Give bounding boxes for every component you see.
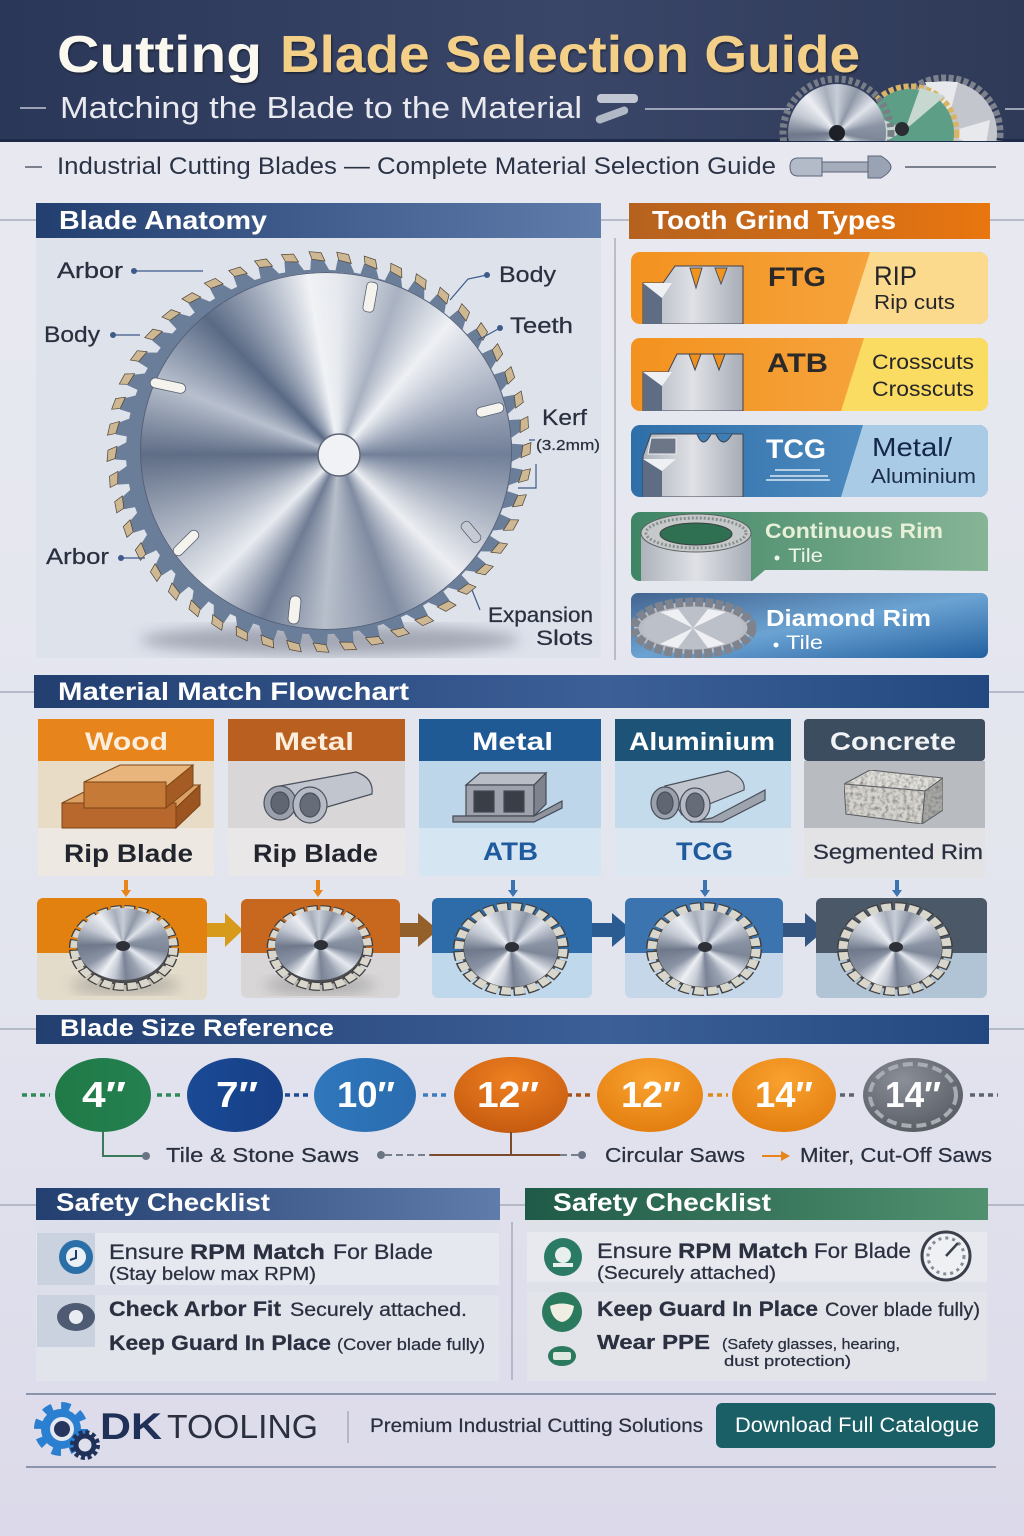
row: TCG: Aluminium xyxy=(871,466,976,488)
row: FTG: RIP xyxy=(874,261,917,291)
icon: header blades xyxy=(780,74,1004,141)
title xyxy=(57,26,860,84)
size: 12 inch xyxy=(597,1058,703,1132)
size: 14 inch segmented xyxy=(863,1058,963,1132)
row: TCG: TCG xyxy=(766,434,826,464)
row: RPM: Ensure xyxy=(597,1240,672,1263)
card: metal rip: Rip Blade xyxy=(253,840,378,868)
tagline: Premium Industrial Cutting Solutions xyxy=(370,1416,703,1437)
row: TCG: Metal/ xyxy=(872,432,953,462)
subtitle: Matching the Blade to the Material xyxy=(60,90,582,125)
row: continuous rim: Tile xyxy=(788,546,823,567)
icon: blade xyxy=(843,907,947,991)
arrow: ATB to aluminium xyxy=(592,913,632,947)
panel: blade size reference xyxy=(22,1015,998,1167)
card: metal rip xyxy=(228,719,405,876)
icon: concrete block xyxy=(844,770,943,824)
icon: blade xyxy=(459,907,563,991)
icon: bolt xyxy=(790,156,891,178)
title: Cutting xyxy=(57,26,262,84)
row: ATB: Crosscuts xyxy=(872,351,974,374)
panel: tooth grind types xyxy=(629,203,990,658)
heading: size reference: Blade Size Reference xyxy=(60,1015,334,1042)
size: 7 inch xyxy=(187,1058,283,1132)
heading: flowchart: Material Match Flowchart xyxy=(58,678,410,706)
application labels: Circular Saws xyxy=(605,1145,745,1167)
size: 4 inch: 4″ xyxy=(82,1074,126,1115)
logo wordmark xyxy=(100,1406,318,1447)
row: arbor and guard: Securely attached. xyxy=(290,1300,467,1321)
heading: safety checklist xyxy=(36,1188,500,1220)
arrow: aluminium to concrete xyxy=(783,913,825,947)
row: arbor and guard: (Cover blade fully) xyxy=(337,1335,485,1354)
heading: size reference xyxy=(36,1015,989,1044)
icon: wood planks xyxy=(62,765,200,828)
size: 14 inch xyxy=(732,1058,836,1132)
anatomy labels: Arbor xyxy=(46,544,109,569)
row: FTG: Rip cuts xyxy=(874,292,955,314)
blade tile: metal ATB xyxy=(432,898,592,998)
heading: safety checklist xyxy=(525,1188,988,1220)
expansion slots xyxy=(149,281,505,624)
application labels xyxy=(166,1145,992,1167)
header banner xyxy=(0,0,1024,142)
size: 4 inch xyxy=(55,1058,151,1132)
card: wood: Rip Blade xyxy=(64,840,193,868)
subtitle band: Industrial Cutting Blades — Complete Material Selection Guide xyxy=(57,153,776,180)
card: wood xyxy=(38,719,214,876)
row: RPM: Ensure xyxy=(109,1241,184,1264)
icon: metal tubes xyxy=(264,772,372,823)
logo wordmark: DK xyxy=(100,1406,162,1447)
connector arrows: card to blade xyxy=(121,880,902,897)
card: aluminium xyxy=(615,719,791,876)
row: RPM: For Blade xyxy=(814,1240,911,1263)
icon: aluminium tubes xyxy=(651,771,765,822)
row: continuous rim xyxy=(631,512,988,581)
row: arbor and guard: Keep Guard In Place xyxy=(109,1332,331,1355)
heading: tooth grind types: Tooth Grind Types xyxy=(652,205,896,235)
heading: flowchart xyxy=(34,675,989,708)
row: RPM xyxy=(527,1232,987,1283)
icon: saw blade xyxy=(89,234,549,670)
row: continuous rim: Continuous Rim xyxy=(765,520,943,543)
button: download catalogue: Download Full Catalogue xyxy=(735,1414,979,1437)
icon: TCG tooth xyxy=(643,434,743,497)
row: guard and PPE: Wear PPE xyxy=(597,1332,710,1354)
application labels: Miter, Cut-Off Saws xyxy=(800,1145,992,1167)
anatomy labels: Teeth xyxy=(510,313,573,338)
button: download catalogue xyxy=(716,1403,995,1448)
heading: blade anatomy: Blade Anatomy xyxy=(59,205,268,235)
row: ATB: ATB xyxy=(767,348,828,378)
card: metal ATB: Metal xyxy=(472,728,553,756)
row: arbor and guard: Check Arbor Fit xyxy=(109,1298,281,1321)
size: 10 inch: 10″ xyxy=(337,1074,395,1115)
row: diamond rim xyxy=(631,593,988,658)
icon: gauge xyxy=(922,1232,970,1280)
section rules xyxy=(0,220,1024,1380)
panel: safety checklist left xyxy=(36,1188,500,1381)
row: guard and PPE: (Safety glasses, hearing, xyxy=(722,1336,900,1353)
subtitle band xyxy=(25,153,996,180)
blade tile: aluminium xyxy=(625,898,783,998)
icon: guard xyxy=(542,1292,582,1332)
anatomy labels: Slots xyxy=(536,627,593,650)
row: guard and PPE: Cover blade fully) xyxy=(825,1300,980,1321)
icon: continuous rim cylinder xyxy=(641,514,751,581)
size connectors xyxy=(22,1093,998,1097)
icon: arbor xyxy=(57,1303,95,1331)
row: FTG xyxy=(631,252,988,324)
panel: blade anatomy xyxy=(36,203,601,670)
row: RPM: (Securely attached) xyxy=(597,1263,776,1283)
TCG dimension lines xyxy=(766,470,830,480)
card: metal ATB xyxy=(419,719,601,876)
row: diamond rim: Tile xyxy=(786,633,823,654)
icon: steel block xyxy=(453,773,562,822)
icon: blade xyxy=(75,908,173,986)
row: arbor and guard xyxy=(36,1295,499,1381)
heading: blade anatomy xyxy=(36,203,601,238)
card: aluminium: Aluminium xyxy=(629,728,775,756)
card: metal ATB: ATB xyxy=(483,838,538,866)
icon: FTG tooth xyxy=(643,266,743,324)
icon: RPM xyxy=(544,1238,582,1276)
logo wordmark: TOOLING xyxy=(167,1408,318,1445)
size: 14 inch segmented: 14″ xyxy=(885,1074,941,1115)
size: 10 inch xyxy=(314,1058,416,1132)
card: aluminium: TCG xyxy=(676,838,733,866)
size: 12 inch: 12″ xyxy=(477,1074,539,1115)
anatomy labels: Kerf xyxy=(542,405,588,430)
icon: PPE xyxy=(548,1346,576,1366)
icon: RPM xyxy=(59,1240,93,1274)
row: RPM: RPM Match xyxy=(678,1240,808,1263)
anatomy labels xyxy=(44,258,600,650)
header rules xyxy=(20,108,1024,109)
icon: ATB tooth xyxy=(643,354,743,411)
anatomy labels: Arbor xyxy=(57,258,123,283)
row: RPM: (Stay below max RPM) xyxy=(109,1264,316,1284)
title: Blade Selection Guide xyxy=(280,26,860,84)
blade tile: wood xyxy=(37,898,207,1000)
arrow: metal to ATB xyxy=(400,913,438,947)
row: RPM: RPM Match xyxy=(190,1241,325,1264)
row: RPM: For Blade xyxy=(333,1241,433,1264)
row: guard and PPE xyxy=(527,1292,987,1381)
blade shadow xyxy=(140,625,520,655)
heading: tooth grind types xyxy=(629,203,990,239)
size: 14 inch: 14″ xyxy=(755,1074,813,1115)
arbor hole xyxy=(318,434,360,476)
icon: pins xyxy=(595,94,638,125)
panel: safety checklist right xyxy=(525,1188,988,1381)
blade tile: concrete xyxy=(816,898,987,998)
anatomy labels: Expansion xyxy=(488,604,593,627)
arrow: wood to metal xyxy=(207,913,243,947)
panel background xyxy=(36,238,601,658)
icon: diamond rim blade xyxy=(634,602,752,654)
anatomy labels: Body xyxy=(44,322,100,347)
card: concrete xyxy=(804,719,985,878)
row: TCG xyxy=(631,425,988,497)
heading: safety checklist: Safety Checklist xyxy=(56,1189,271,1217)
bracket end dots xyxy=(142,1151,586,1160)
card: concrete: Concrete xyxy=(830,728,956,756)
card: wood: Wood xyxy=(85,728,168,756)
size: 7 inch: 7″ xyxy=(216,1074,258,1115)
card: concrete: Segmented Rim xyxy=(813,841,983,864)
row: ATB: Crosscuts xyxy=(872,378,974,401)
application brackets xyxy=(103,1132,782,1156)
anatomy labels: Body xyxy=(499,262,556,287)
row: guard and PPE: dust protection) xyxy=(724,1353,851,1370)
footer xyxy=(26,1394,996,1467)
application labels: Tile & Stone Saws xyxy=(166,1145,359,1167)
card: metal rip: Metal xyxy=(274,728,354,756)
row: FTG: FTG xyxy=(768,262,826,292)
icon: blade xyxy=(272,910,368,986)
panel: material match flowchart xyxy=(34,675,989,1000)
size: 12 inch xyxy=(454,1057,568,1133)
heading: safety checklist: Safety Checklist xyxy=(553,1189,772,1217)
row: RPM xyxy=(36,1233,499,1285)
blade tile: metal xyxy=(241,899,400,998)
size: 12 inch: 12″ xyxy=(621,1074,681,1115)
icon: blade xyxy=(652,907,756,991)
icon: gears logo xyxy=(38,1406,98,1458)
row: diamond rim: Diamond Rim xyxy=(766,605,931,631)
row: guard and PPE: Keep Guard In Place xyxy=(597,1298,818,1321)
anatomy labels: (3.2mm) xyxy=(536,437,600,454)
row: ATB xyxy=(631,338,988,411)
